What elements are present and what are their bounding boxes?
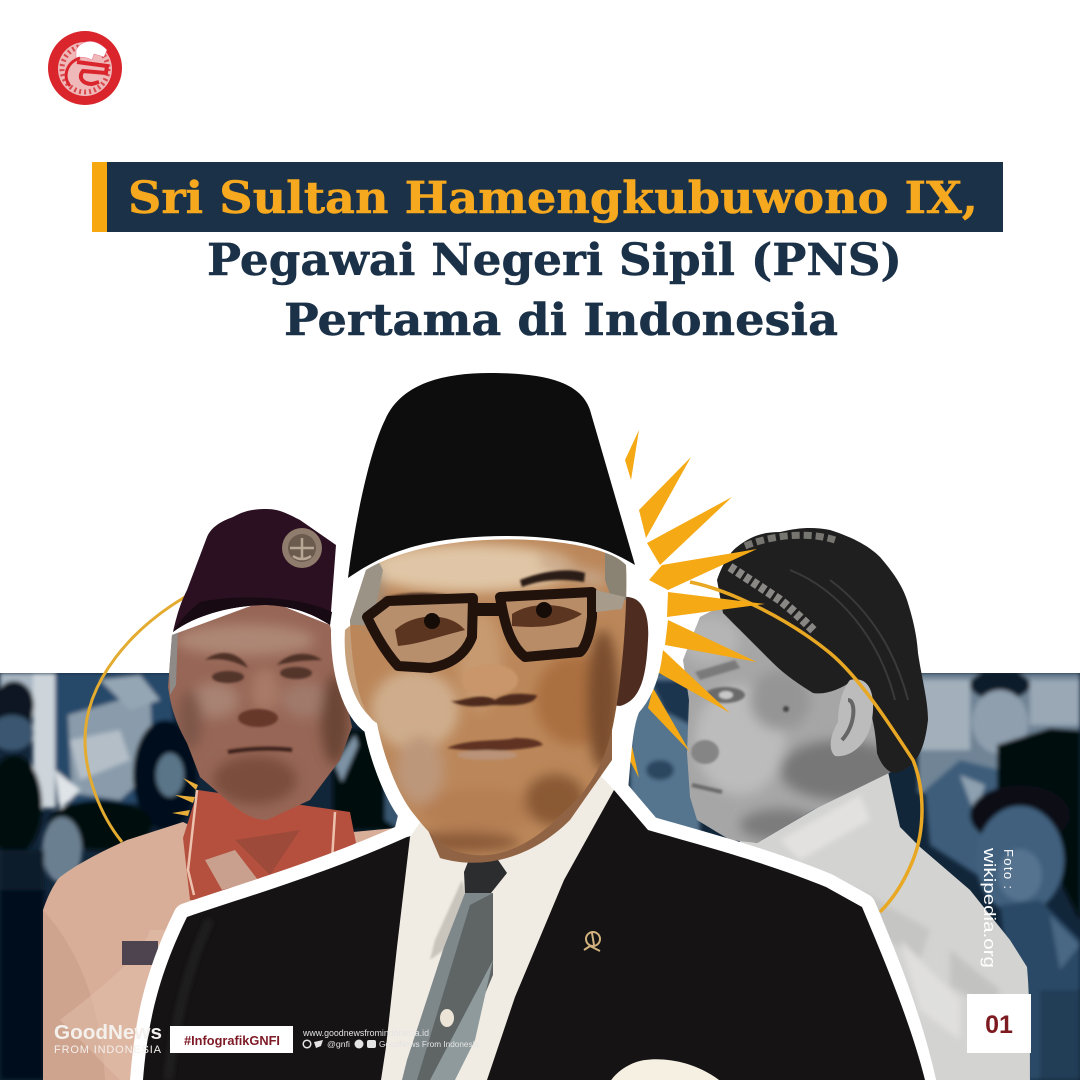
left figure red scarf bbox=[183, 790, 356, 900]
hashtag box bbox=[170, 1026, 293, 1053]
logo: GNFI red circle bbox=[48, 31, 122, 105]
title banner bbox=[92, 162, 1003, 232]
left portrait: man in beret bbox=[43, 509, 400, 1080]
title line three: Pertama di Indonesia bbox=[284, 295, 838, 346]
suit bbox=[143, 790, 925, 1080]
glasses eyes bbox=[395, 616, 465, 646]
beret badge bbox=[282, 528, 322, 568]
photo credit rotated bbox=[980, 847, 1016, 968]
right orange arc bbox=[690, 582, 922, 912]
footer brand: GoodNews from Indonesia: FROM INDONESIA bbox=[54, 1044, 162, 1056]
left figure shirt bbox=[43, 822, 400, 1080]
background crowd photo band bbox=[0, 670, 1080, 1080]
footer website and social handles: www.goodnewsfromindonesia.id bbox=[302, 1028, 429, 1038]
left figure shoulder patch bbox=[122, 941, 158, 965]
right figure ear bbox=[831, 679, 873, 756]
central portrait: Sri Sultan Hamengkubuwono IX bbox=[143, 373, 925, 1080]
glasses bbox=[367, 590, 625, 668]
orange sunburst rays bbox=[625, 430, 765, 778]
neck shadow bbox=[400, 720, 612, 863]
page number box bbox=[967, 994, 1031, 1053]
left figure beret bbox=[173, 509, 336, 632]
left crowd bbox=[0, 673, 33, 703]
right crowd bbox=[918, 673, 1080, 793]
small rays behind left figure bbox=[172, 778, 198, 816]
right figure face bbox=[683, 610, 891, 843]
title line two: Pegawai Negeri Sipil (PNS) bbox=[207, 235, 902, 286]
left figure face bbox=[168, 605, 352, 820]
left figure facial features bbox=[205, 653, 322, 752]
grey hair at temples bbox=[350, 563, 383, 625]
left orange arc bbox=[85, 597, 185, 842]
footer website and social handles: GoodNews From Indonesia bbox=[379, 1039, 479, 1049]
page number box: 01 bbox=[985, 1011, 1013, 1039]
right ear bbox=[610, 597, 648, 706]
photo credit rotated: Foto : bbox=[1001, 849, 1016, 889]
photo credit rotated: wikipedia.org bbox=[980, 847, 999, 968]
footer website and social handles bbox=[302, 1028, 479, 1049]
face bbox=[350, 539, 626, 856]
footer website and social handles: @gnfi bbox=[327, 1039, 350, 1049]
tie bar pin bbox=[440, 1009, 454, 1027]
left ear bbox=[345, 623, 384, 725]
right figure facial features bbox=[691, 660, 789, 792]
hashtag box: #InfografikGNFI bbox=[184, 1033, 280, 1048]
footer brand: GoodNews from Indonesia: GoodNews bbox=[54, 1022, 162, 1044]
pocket square bbox=[608, 1059, 725, 1080]
gap crowd behind left and main figure bbox=[333, 730, 403, 830]
right figure blangkon headwear bbox=[717, 528, 928, 773]
right portrait: man in blangkon bbox=[670, 528, 1030, 1080]
black peci cap bbox=[348, 373, 635, 578]
title banner: Sri Sultan Hamengkubuwono IX, bbox=[128, 173, 978, 224]
nose and lips bbox=[382, 570, 585, 760]
footer brand: GoodNews from Indonesia bbox=[54, 1022, 162, 1056]
middle crowd bbox=[630, 673, 700, 843]
right figure garment bbox=[700, 767, 1030, 1080]
tie bbox=[402, 857, 507, 1080]
lapel pin bbox=[584, 932, 600, 951]
white cut-out outline bbox=[143, 373, 925, 1080]
shirt bbox=[381, 775, 614, 1080]
